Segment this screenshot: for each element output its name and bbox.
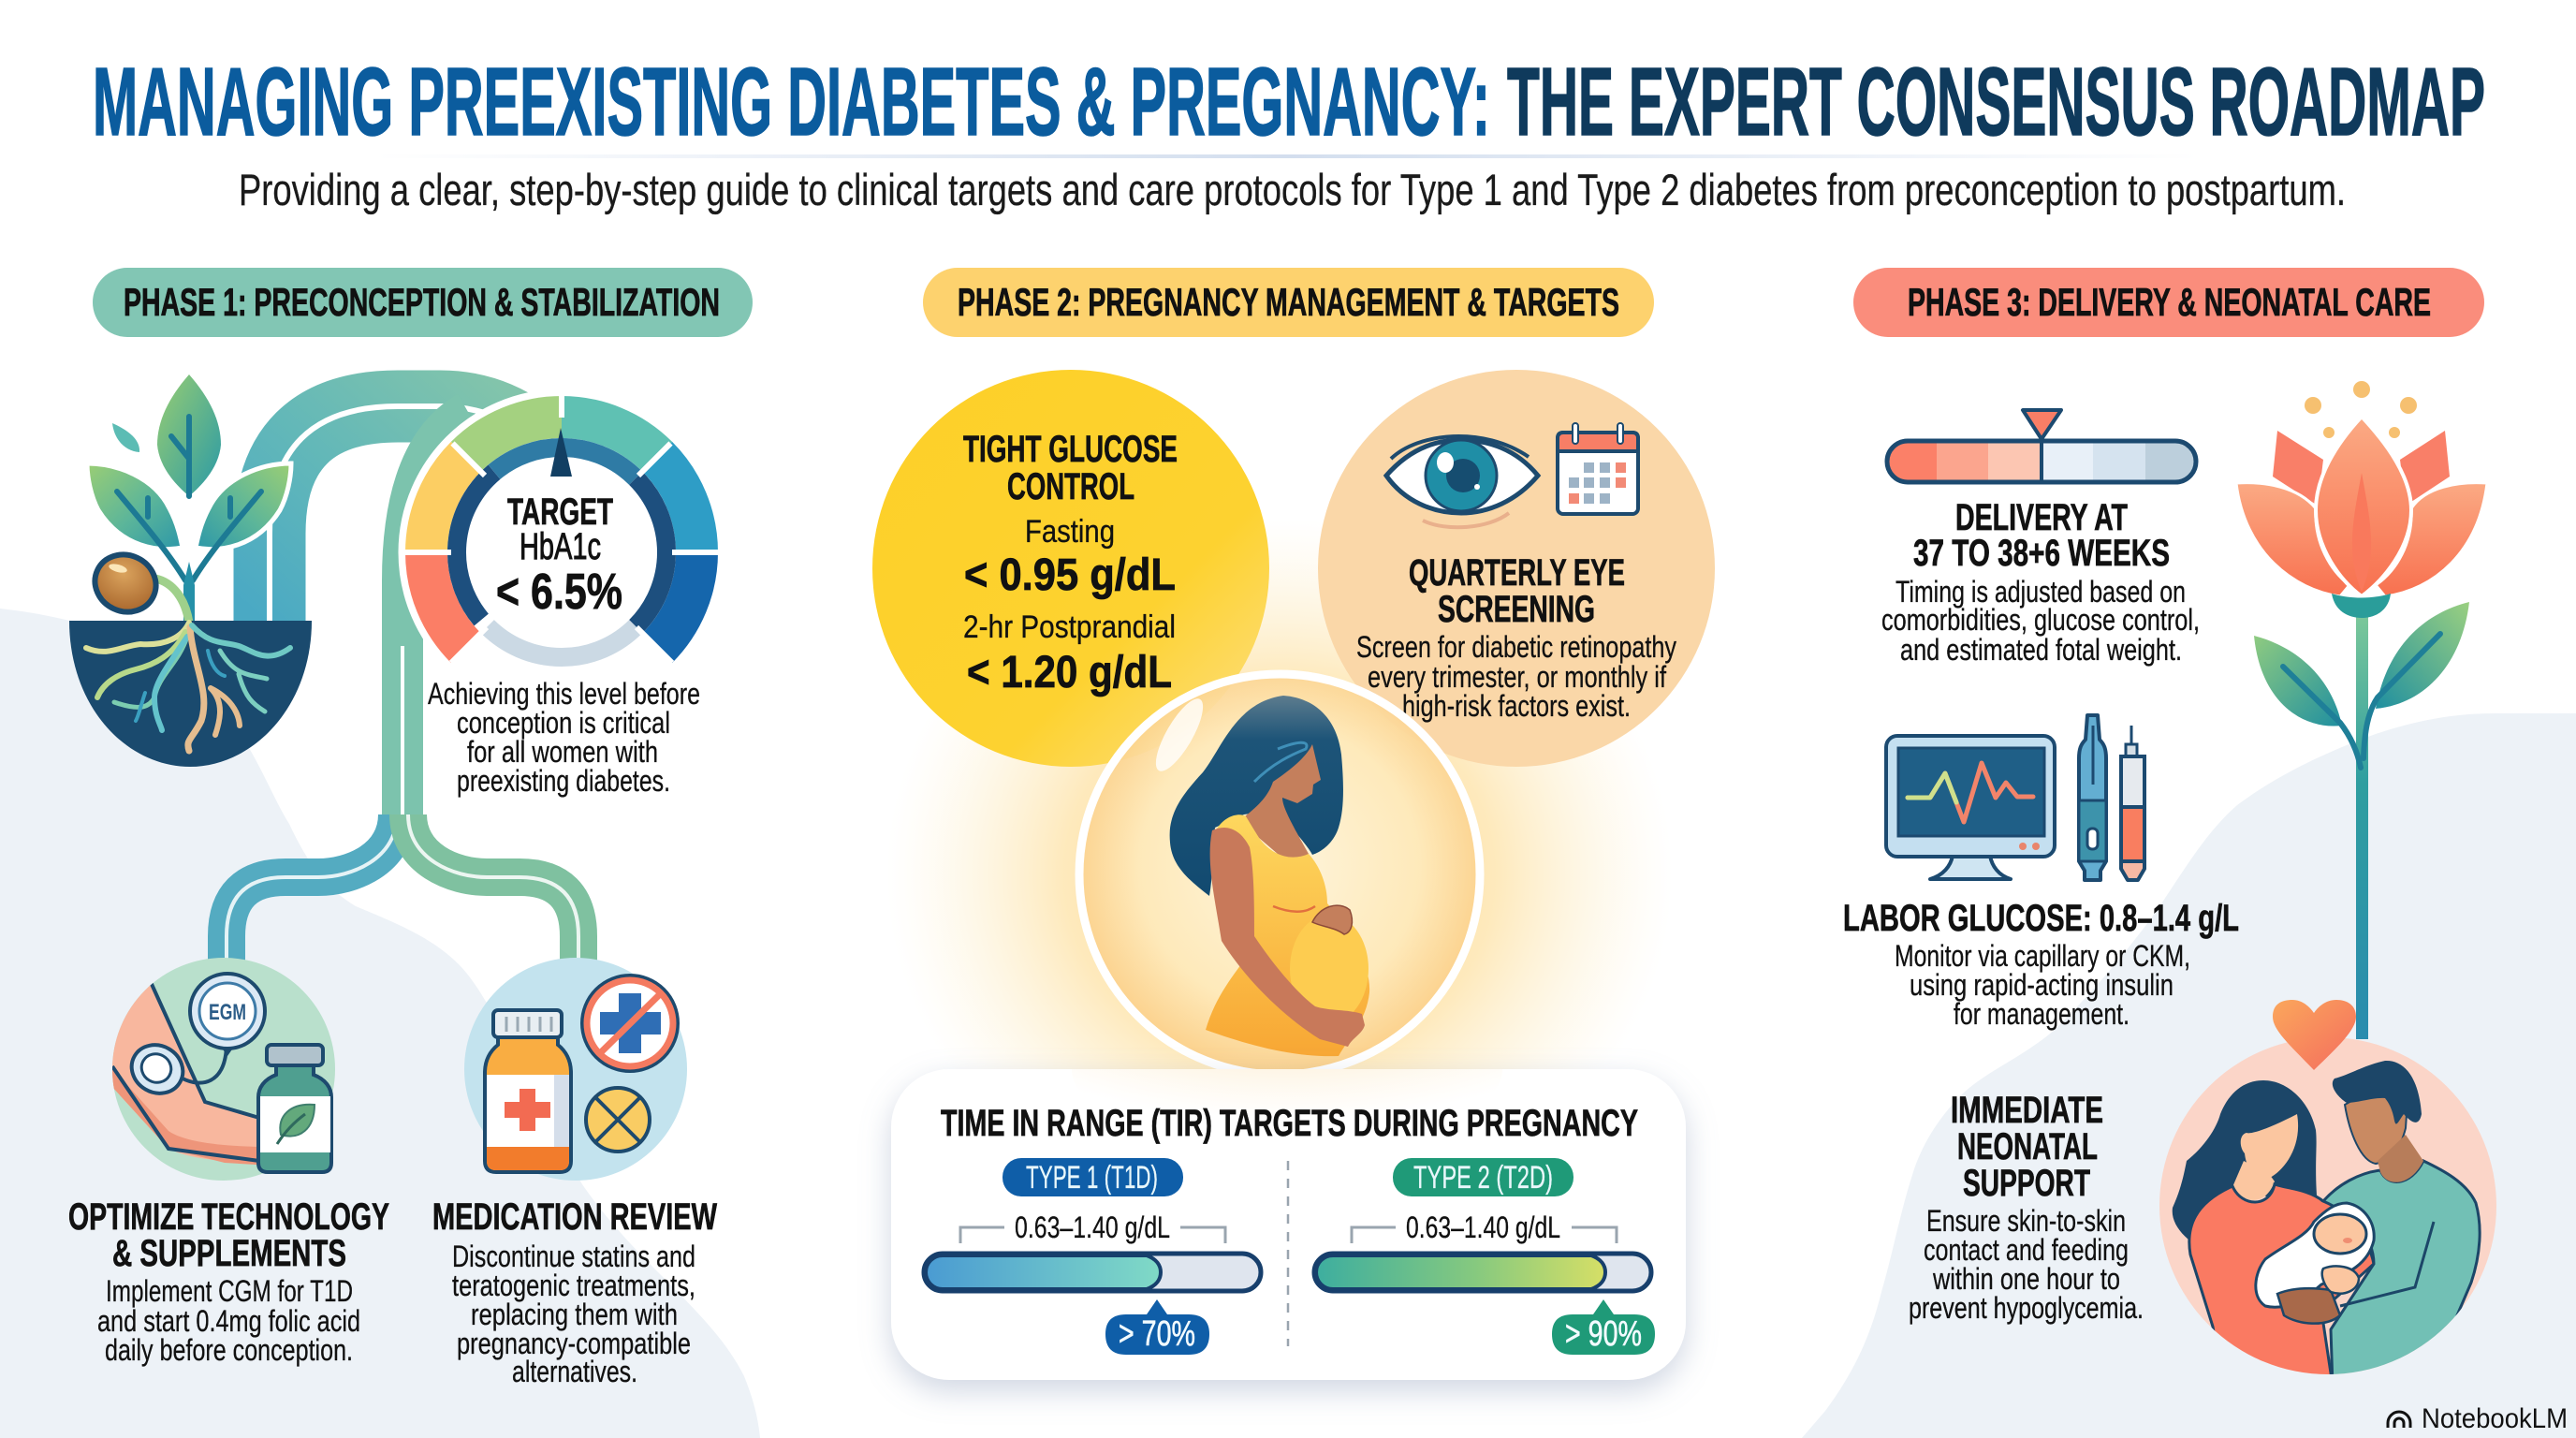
panel: quarterly eye screening: [1318, 370, 1715, 767]
text: labor glucose: LABOR GLUCOSE: 0.8–1.4 g/L: [1843, 898, 2239, 939]
illustration: lotus flower: [2236, 381, 2487, 1039]
text: delivery at 37 to 38+6 weeks: Timing is adjusted based on: [1895, 575, 2186, 609]
gauge description: [428, 677, 700, 798]
text: medication review: pregnancy-compatible: [457, 1327, 691, 1360]
type 1 bar: 0.63–1.40 g/dL: [1015, 1211, 1170, 1244]
text: labor glucose: using rapid-acting insulin: [1910, 968, 2174, 1002]
roadmap pipes: [227, 406, 578, 964]
type 2 bar: [1314, 1158, 1655, 1355]
phase 1 heading: [93, 268, 753, 337]
panel: tight glucose control: Fasting: [1025, 514, 1115, 550]
text: immediate neonatal support: [1909, 1090, 2144, 1325]
central glow: [886, 519, 1673, 1230]
icon: medication bottle and prohibited signs: [464, 958, 687, 1181]
gauge: target HbA1c: HbA1c: [520, 526, 601, 567]
text: delivery at 37 to 38+6 weeks: comorbidities, glucose control,: [1881, 603, 2200, 637]
text: immediate neonatal support: Ensure skin-to-skin: [1926, 1204, 2126, 1238]
icon: heart: [2273, 1000, 2356, 1070]
icon: sprouting plant with roots: [69, 374, 312, 767]
text: delivery at 37 to 38+6 weeks: [1881, 497, 2200, 667]
icon: CGM sensor and supplement bottle: [103, 958, 335, 1181]
type 1 bar: > 70%: [1119, 1314, 1195, 1354]
text: immediate neonatal support: prevent hypoglycemia.: [1909, 1291, 2144, 1325]
text: immediate neonatal support: SUPPORT: [1963, 1163, 2090, 1204]
phase 2 heading: [923, 268, 1654, 337]
gauge: target HbA1c: < 6.5%: [496, 564, 622, 620]
panel: tight glucose control: 2-hr Postprandial: [963, 609, 1176, 645]
illustration: pregnant woman in bubble: [1079, 674, 1480, 1075]
text: optimize technology and supplements: OPTIMIZE TECHNOLOGY: [68, 1196, 389, 1238]
type 1 bar: TYPE 1 (T1D): [1026, 1160, 1158, 1196]
text: medication review: Discontinue statins and: [452, 1240, 695, 1273]
gauge description: Achieving this level before: [428, 677, 700, 711]
text: medication review: replacing them with: [471, 1298, 678, 1331]
woman figure: [2173, 1080, 2374, 1386]
text: delivery at 37 to 38+6 weeks: 37 TO 38+6 WEEKS: [1913, 533, 2170, 574]
panel: time in range targets: [877, 1066, 1700, 1405]
text: immediate neonatal support: NEONATAL: [1957, 1126, 2098, 1167]
panel: quarterly eye screening: Screen for diabetic retinopathy: [1356, 630, 1676, 664]
panel: tight glucose control: TIGHT GLUCOSE: [963, 429, 1178, 470]
text: medication review: [432, 1196, 717, 1388]
icon: glucose monitor and insulin pens: [1886, 715, 2144, 880]
panel: quarterly eye screening: SCREENING: [1438, 589, 1595, 630]
icon: calendar: [1558, 423, 1638, 514]
panel: tight glucose control: < 0.95 g/dL: [964, 550, 1176, 600]
text: labor glucose: for management.: [1954, 997, 2130, 1031]
phase 3 heading: [1853, 268, 2484, 337]
text: delivery at 37 to 38+6 weeks: and estimated fotal weight.: [1900, 633, 2182, 667]
text: immediate neonatal support: within one hour to: [1932, 1262, 2120, 1296]
panel: quarterly eye screening: every trimester, or monthly if: [1368, 660, 1666, 694]
text: optimize technology and supplements: [68, 1196, 389, 1367]
text: optimize technology and supplements: Implement CGM for T1D: [106, 1274, 353, 1308]
type 2 bar: TYPE 2 (T2D): [1413, 1160, 1553, 1196]
text: immediate neonatal support: contact and feeding: [1924, 1233, 2129, 1267]
panel: tight glucose control: CONTROL: [1007, 466, 1134, 507]
holding hands: [2277, 1266, 2359, 1324]
illustration: family with newborn: [2159, 1037, 2496, 1386]
icon: CGM sensor and supplement bottle: EGM: [209, 1000, 246, 1025]
text: labor glucose: Monitor via capillary or CKM,: [1895, 939, 2190, 973]
phase 2 heading: PHASE 2: PREGNANCY MANAGEMENT & TARGETS: [958, 280, 1619, 324]
gauge description: conception is critical: [457, 706, 670, 740]
gauge description: for all women with: [467, 735, 658, 769]
type 1 bar: [924, 1158, 1261, 1355]
text: medication review: alternatives.: [512, 1355, 637, 1388]
gauge description: preexisting diabetes.: [457, 764, 670, 798]
text: immediate neonatal support: IMMEDIATE: [1951, 1090, 2103, 1131]
text: medication review: teratogenic treatments,: [452, 1269, 695, 1302]
text: medication review: MEDICATION REVIEW: [432, 1196, 717, 1238]
text: optimize technology and supplements: & SUPPLEMENTS: [112, 1233, 346, 1274]
gauge: target HbA1c: [402, 393, 721, 663]
gauge: target HbA1c: TARGET: [507, 492, 613, 533]
icon: eye: [1386, 436, 1538, 527]
phase 1 heading: PHASE 1: PRECONCEPTION & STABILIZATION: [124, 280, 720, 324]
gauge needle: [550, 428, 572, 477]
panel: quarterly eye screening: QUARTERLY EYE: [1409, 552, 1625, 594]
panel: time in range targets: TIME IN RANGE (TIR) TARGETS DURING PREGNANCY: [941, 1103, 1638, 1144]
panel: quarterly eye screening: high-risk factors exist.: [1402, 689, 1631, 723]
title: MANAGING PREEXISTING DIABETES & PREGNANCY:: [93, 48, 1490, 155]
text: optimize technology and supplements: and start 0.4mg folic acid: [97, 1304, 360, 1338]
text: optimize technology and supplements: daily before conception.: [105, 1333, 353, 1367]
icon: delivery timeline bar: [1887, 410, 2196, 483]
panel: tight glucose control: < 1.20 g/dL: [967, 648, 1172, 697]
type 2 bar: > 90%: [1565, 1314, 1642, 1354]
text: labor glucose: [1843, 898, 2239, 1031]
text: delivery at 37 to 38+6 weeks: DELIVERY AT: [1955, 497, 2128, 538]
man figure: [2323, 1061, 2480, 1386]
newborn baby: [2256, 1203, 2374, 1307]
type 2 bar: 0.63–1.40 g/dL: [1406, 1211, 1560, 1244]
panel: tight glucose control: [872, 370, 1269, 767]
